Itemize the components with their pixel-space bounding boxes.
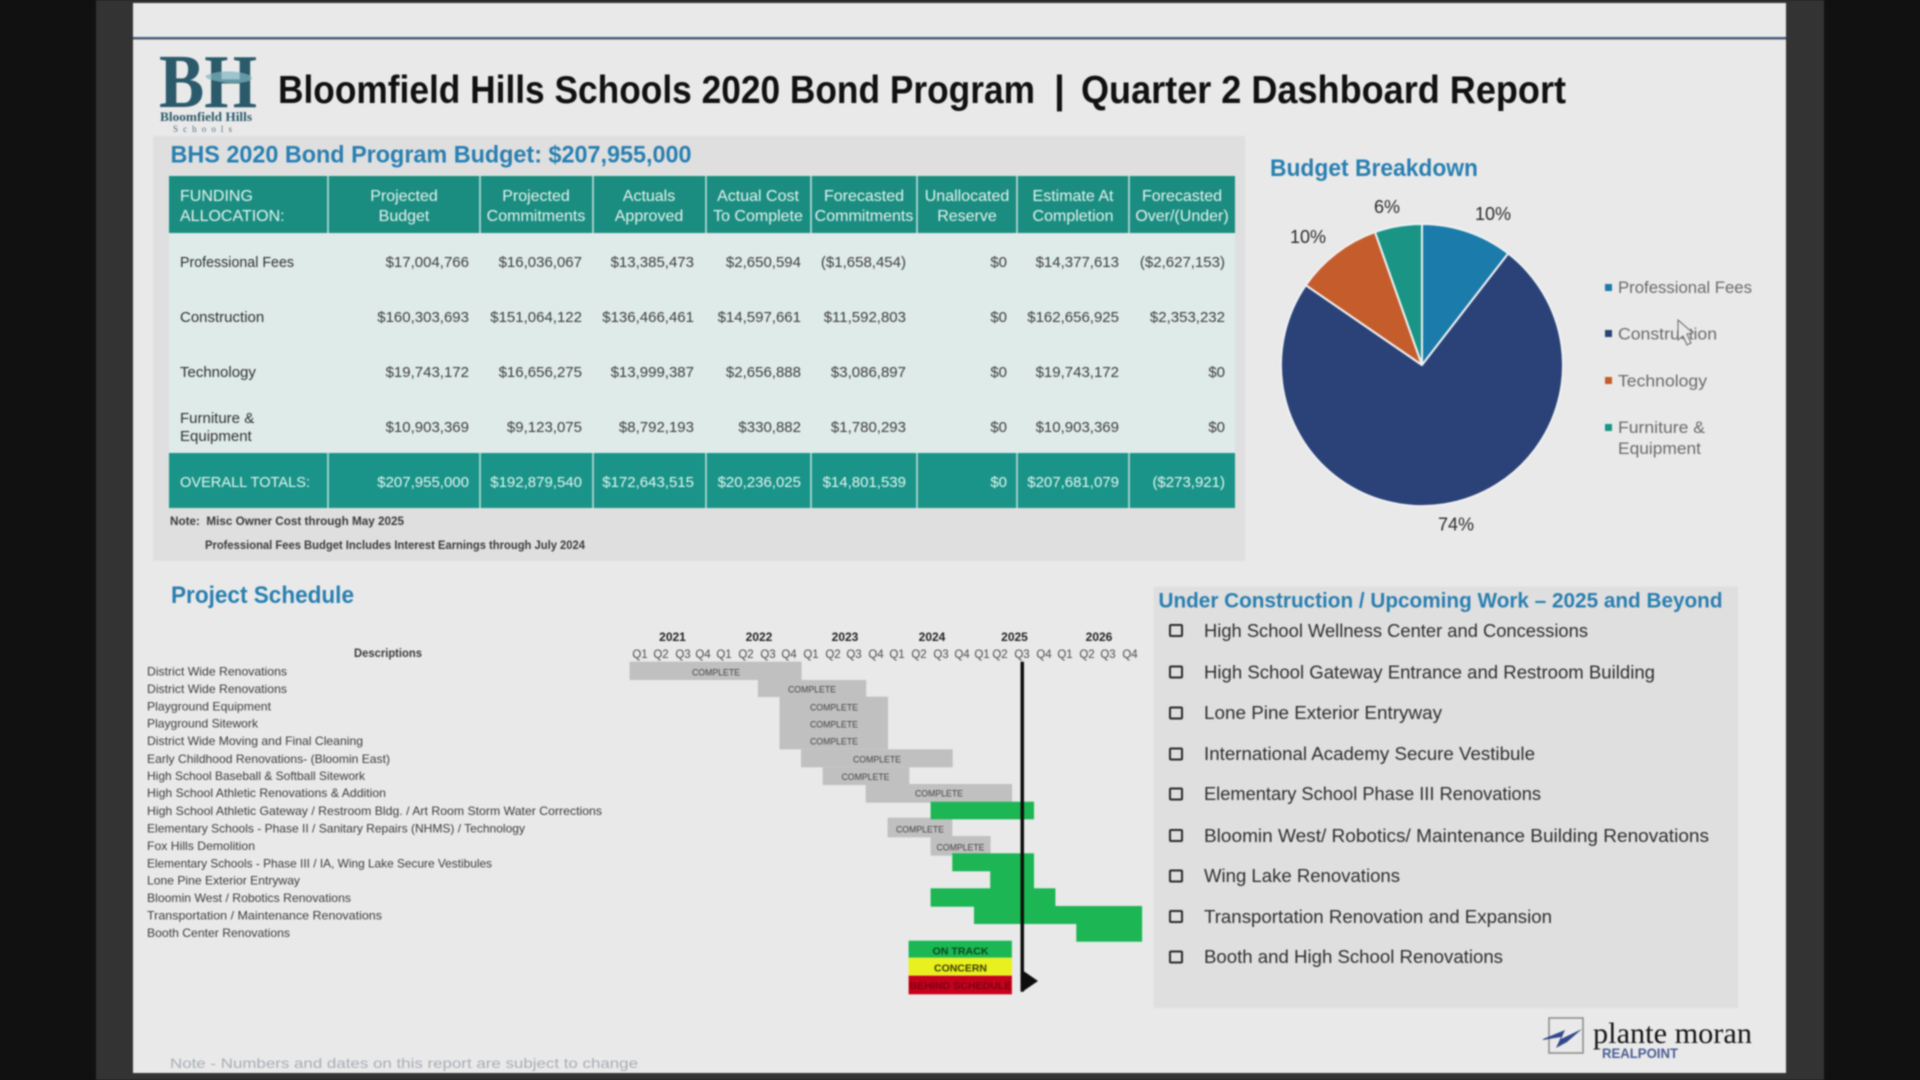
table header row: Forecasted xyxy=(824,188,904,205)
pie legend: Construction xyxy=(1618,324,1717,344)
gantt timeline header: Q2 xyxy=(992,649,1008,661)
schedule descriptions: Booth Center Renovations xyxy=(147,926,290,940)
schedule descriptions: District Wide Renovations xyxy=(147,682,287,696)
gantt chart bars xyxy=(630,662,1142,942)
footer note: Note - Numbers and dates on this report are subject to change xyxy=(170,1055,638,1071)
table header row: Budget xyxy=(379,208,430,225)
row: technology: $13,999,387 xyxy=(611,364,694,381)
row: professional fees: $2,650,594 xyxy=(726,254,801,271)
pie legend: Furniture & xyxy=(1618,418,1706,437)
complete labels: COMPLETE xyxy=(842,772,890,782)
list: upcoming projects: Booth and High School Renovations xyxy=(1204,947,1503,967)
row: technology: $16,656,275 xyxy=(499,364,582,381)
table header row: To Complete xyxy=(713,208,803,225)
row: professional fees: $0 xyxy=(990,254,1007,271)
row: construction: $160,303,693 xyxy=(377,309,469,326)
row: professional fees: $14,377,613 xyxy=(1036,254,1119,271)
gantt timeline header: Q4 xyxy=(1036,649,1052,661)
pie legend: Technology xyxy=(1618,372,1708,390)
schedule descriptions: High School Athletic Renovations & Addition xyxy=(147,786,386,800)
row: professional fees xyxy=(180,254,1225,271)
row: construction: $0 xyxy=(990,309,1007,326)
complete labels: COMPLETE xyxy=(915,788,963,798)
pie legend xyxy=(1605,278,1752,458)
schedule descriptions: High School Baseball & Softball Sitework xyxy=(147,769,366,783)
row: overall totals: $207,955,000 xyxy=(377,474,469,491)
gantt timeline header: Q2 xyxy=(1079,649,1095,661)
list: upcoming projects: Transportation Renovation and Expansion xyxy=(1204,907,1552,927)
logo: plante moran realpoint: plante moran xyxy=(1593,1017,1752,1050)
on-track bars xyxy=(931,802,1142,942)
pie value labels: 74% xyxy=(1438,514,1474,534)
row: construction: $2,353,232 xyxy=(1150,309,1225,326)
table header row: Unallocated xyxy=(925,188,1009,205)
row: furniture and equipment xyxy=(180,410,1225,445)
gantt timeline header: 2023 xyxy=(832,630,859,644)
row: professional fees: $16,036,067 xyxy=(499,254,582,271)
row: overall totals: ($273,921) xyxy=(1152,474,1225,491)
gantt timeline header: 2025 xyxy=(1001,630,1028,644)
row: overall totals: $20,236,025 xyxy=(718,474,801,491)
title xyxy=(278,69,1566,112)
row: technology: Technology xyxy=(180,364,256,381)
complete labels xyxy=(692,668,984,852)
row: construction: $14,597,661 xyxy=(718,309,801,326)
gantt timeline header: Q2 xyxy=(738,649,754,661)
status legend: CONCERN xyxy=(934,962,987,974)
table header row: Projected xyxy=(502,188,570,205)
title: Quarter 2 Dashboard Report xyxy=(1081,69,1566,112)
gantt timeline header: Q3 xyxy=(675,649,691,661)
table header row: Reserve xyxy=(937,208,997,225)
gantt timeline header: Q1 xyxy=(803,649,819,661)
schedule descriptions: High School Athletic Gateway / Restroom Bldg. / Art Room Storm Water Corrections xyxy=(147,804,602,818)
row: technology: $3,086,897 xyxy=(831,364,906,381)
list: upcoming projects: Wing Lake Renovations xyxy=(1204,866,1400,886)
row: furniture and equipment: Furniture & xyxy=(180,410,254,427)
row: furniture and equipment: $1,780,293 xyxy=(831,419,906,436)
row: construction: $136,466,461 xyxy=(602,309,694,326)
schedule descriptions: Playground Equipment xyxy=(147,700,272,714)
gantt timeline header: 2024 xyxy=(919,630,946,644)
row: furniture and equipment: $0 xyxy=(1208,419,1225,436)
logo: plante moran realpoint xyxy=(1543,1017,1752,1061)
list: upcoming projects: Lone Pine Exterior Entryway xyxy=(1204,703,1442,723)
table notes xyxy=(170,514,585,552)
row: furniture and equipment: $8,792,193 xyxy=(619,419,694,436)
pie chart: budget breakdown xyxy=(1281,224,1563,506)
table notes: Note: Misc Owner Cost through May 2025 xyxy=(170,514,404,528)
gantt timeline header: Q4 xyxy=(954,649,970,661)
schedule descriptions: Descriptions xyxy=(354,646,422,660)
today marker line and arrow xyxy=(1020,662,1038,992)
pie value labels: 6% xyxy=(1374,197,1400,217)
gantt timeline header: Q3 xyxy=(760,649,776,661)
row: technology: $2,656,888 xyxy=(726,364,801,381)
heading: program budget: BHS 2020 Bond Program Budget: $207,955,000 xyxy=(170,142,692,168)
complete labels: COMPLETE xyxy=(936,842,984,852)
pie value labels xyxy=(1290,197,1511,534)
schedule descriptions: Lone Pine Exterior Entryway xyxy=(147,874,300,888)
completed bars xyxy=(630,662,1012,856)
table header row: Estimate At xyxy=(1033,188,1114,205)
pie value labels: 10% xyxy=(1290,227,1326,247)
status legend xyxy=(909,941,1012,994)
icon: mouse cursor xyxy=(1678,320,1693,345)
table header row: ALLOCATION: xyxy=(180,208,285,225)
gantt timeline header: Q4 xyxy=(695,649,711,661)
row: furniture and equipment: $10,903,369 xyxy=(386,419,469,436)
heading: project schedule: Project Schedule xyxy=(171,582,354,609)
list: upcoming projects: International Academy Secure Vestibule xyxy=(1204,744,1535,764)
pie legend: Equipment xyxy=(1618,439,1701,458)
table header row: Commitments xyxy=(487,208,585,225)
gantt timeline header: Q1 xyxy=(632,649,648,661)
row: construction: $162,656,925 xyxy=(1027,309,1119,326)
row: furniture and equipment: $10,903,369 xyxy=(1036,419,1119,436)
table header row: Forecasted xyxy=(1142,188,1222,205)
table header row: Over/(Under) xyxy=(1135,208,1229,225)
row: technology xyxy=(180,364,1225,381)
gantt timeline header: Q1 xyxy=(889,649,905,661)
gantt timeline header: 2021 xyxy=(659,630,686,644)
complete labels: COMPLETE xyxy=(853,754,901,764)
table body background xyxy=(169,233,1235,454)
schedule descriptions: Bloomin West / Robotics Renovations xyxy=(147,891,351,905)
row: overall totals: $207,681,079 xyxy=(1027,474,1119,491)
table header row: Completion xyxy=(1033,208,1113,225)
gantt timeline header: Q1 xyxy=(1057,649,1073,661)
logo: Bloomfield Hills Schools: Bloomfield Hills xyxy=(160,109,252,124)
list: upcoming projects: Bloomin West/ Robotics/ Maintenance Building Renovations xyxy=(1204,826,1709,846)
schedule descriptions: Transportation / Maintenance Renovations xyxy=(147,908,382,922)
pie value labels: 10% xyxy=(1475,204,1511,224)
gantt timeline header xyxy=(632,630,1138,661)
row: professional fees: $17,004,766 xyxy=(386,254,469,271)
row: professional fees: ($2,627,153) xyxy=(1140,254,1225,271)
row: professional fees: $13,385,473 xyxy=(611,254,694,271)
panel: budget table xyxy=(153,136,1245,561)
gantt timeline header: Q2 xyxy=(653,649,669,661)
schedule descriptions xyxy=(147,646,602,940)
row: construction: $11,592,803 xyxy=(824,309,906,326)
status legend: BEHIND SCHEDULE xyxy=(910,980,1012,992)
schedule descriptions: Early Childhood Renovations- (Bloomin East) xyxy=(147,752,390,766)
schedule descriptions: Playground Sitework xyxy=(147,716,259,730)
schedule descriptions: Elementary Schools - Phase II / Sanitary Repairs (NHMS) / Technology xyxy=(147,822,525,836)
gantt timeline header: Q3 xyxy=(1100,649,1116,661)
row: furniture and equipment: $330,882 xyxy=(738,419,801,436)
logo: Bloomfield Hills Schools: Schools xyxy=(173,124,232,134)
gantt timeline header: Q3 xyxy=(1014,649,1030,661)
complete labels: COMPLETE xyxy=(896,824,944,834)
logo: plante moran realpoint: REALPOINT xyxy=(1602,1046,1679,1061)
gantt timeline header: Q1 xyxy=(716,649,732,661)
complete labels: COMPLETE xyxy=(810,702,858,712)
gantt timeline header: Q4 xyxy=(868,649,884,661)
table header row: Commitments xyxy=(815,208,913,225)
row: overall totals: $14,801,539 xyxy=(823,474,906,491)
table header row: Actual Cost xyxy=(717,188,799,205)
complete labels: COMPLETE xyxy=(788,684,836,694)
row: overall totals: $172,643,515 xyxy=(602,474,694,491)
heading: upcoming work: Under Construction / Upcoming Work – 2025 and Beyond xyxy=(1158,590,1722,612)
row: construction xyxy=(180,309,1225,326)
row: professional fees: Professional Fees xyxy=(180,254,294,271)
panel: upcoming work xyxy=(1154,586,1738,1008)
title: Bloomfield Hills Schools 2020 Bond Program xyxy=(278,69,1035,112)
table header row: Approved xyxy=(615,208,683,225)
schedule descriptions: Elementary Schools - Phase III / IA, Wing Lake Secure Vestibules xyxy=(147,856,492,870)
schedule descriptions: District Wide Moving and Final Cleaning xyxy=(147,734,363,748)
gantt timeline header: Q4 xyxy=(781,649,797,661)
gantt timeline header: Q2 xyxy=(825,649,841,661)
gantt timeline header: Q3 xyxy=(846,649,862,661)
row: overall totals: OVERALL TOTALS: xyxy=(180,474,310,491)
row: furniture and equipment: Equipment xyxy=(180,428,253,445)
table header row xyxy=(169,176,1235,233)
row: overall totals: $0 xyxy=(990,474,1007,491)
table notes: Professional Fees Budget Includes Interest Earnings through July 2024 xyxy=(205,538,585,552)
complete labels: COMPLETE xyxy=(692,668,740,678)
heading: budget breakdown: Budget Breakdown xyxy=(1270,155,1478,182)
list: upcoming projects: High School Gateway Entrance and Restroom Building xyxy=(1204,662,1655,682)
table header row: FUNDING xyxy=(180,188,253,205)
row: technology: $0 xyxy=(1208,364,1225,381)
list: upcoming projects: High School Wellness Center and Concessions xyxy=(1204,621,1588,641)
schedule descriptions: Fox Hills Demolition xyxy=(147,839,255,853)
schedule descriptions: District Wide Renovations xyxy=(147,664,287,678)
gantt timeline header: Q2 xyxy=(911,649,927,661)
row: furniture and equipment: $9,123,075 xyxy=(507,419,582,436)
gantt timeline header: Q1 xyxy=(974,649,990,661)
logo: Bloomfield Hills Schools: BH xyxy=(159,40,257,124)
row: overall totals: $192,879,540 xyxy=(490,474,582,491)
list: upcoming projects: Elementary School Phase III Renovations xyxy=(1204,784,1541,804)
status legend: ON TRACK xyxy=(932,946,989,958)
title: | xyxy=(1054,69,1065,112)
gantt timeline header: 2022 xyxy=(746,630,773,644)
row: overall totals xyxy=(169,453,1235,508)
gantt timeline header: Q4 xyxy=(1122,649,1138,661)
row: professional fees: ($1,658,454) xyxy=(821,254,906,271)
list: upcoming projects xyxy=(1170,621,1709,967)
row: furniture and equipment: $0 xyxy=(990,419,1007,436)
row: technology: $19,743,172 xyxy=(386,364,469,381)
pie legend: Professional Fees xyxy=(1618,278,1752,297)
table header row: Projected xyxy=(370,188,438,205)
complete labels: COMPLETE xyxy=(810,736,858,746)
table header row: Actuals xyxy=(623,188,675,205)
gantt timeline header: 2026 xyxy=(1086,630,1113,644)
row: technology: $19,743,172 xyxy=(1036,364,1119,381)
gantt timeline header: Q3 xyxy=(933,649,949,661)
row: construction: Construction xyxy=(180,309,264,326)
complete labels: COMPLETE xyxy=(810,720,858,730)
row: construction: $151,064,122 xyxy=(490,309,582,326)
row: technology: $0 xyxy=(990,364,1007,381)
